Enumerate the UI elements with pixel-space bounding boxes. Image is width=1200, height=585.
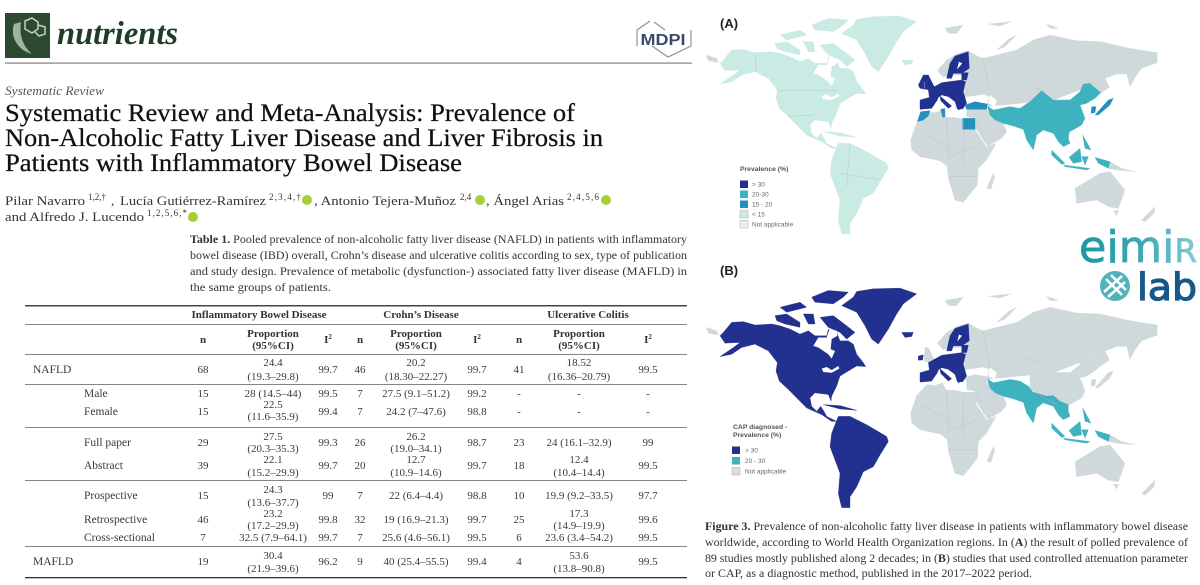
row: Prospective: 98.8 bbox=[467, 490, 487, 502]
gap in Scandinavia bbox=[957, 334, 962, 341]
journal name: nutrients bbox=[57, 16, 178, 52]
country borders bbox=[755, 53, 1070, 187]
row: Cross-sectional: 99.5 bbox=[638, 532, 658, 544]
row: Male: 28 (14.5–44) bbox=[245, 388, 302, 400]
row: NAFLD: NAFLD bbox=[33, 364, 71, 376]
authors: 2,3,4,† bbox=[269, 192, 302, 202]
article title: Patients with Inflammatory Bowel Disease bbox=[5, 150, 462, 177]
row: Abstract: 99.7 bbox=[467, 460, 487, 472]
table bbox=[25, 305, 687, 578]
row: Cross-sectional: 99.5 bbox=[467, 532, 487, 544]
legend B bbox=[732, 424, 787, 476]
row: MAFLD: 30.4 bbox=[263, 550, 283, 562]
not applicable regions bbox=[706, 22, 1157, 222]
row: MAFLD: (21.9–39.6) bbox=[247, 563, 299, 575]
row: Cross-sectional: 23.6 (3.4–54.2) bbox=[545, 532, 613, 544]
column headers: 2 bbox=[477, 333, 481, 341]
column headers: n bbox=[200, 334, 206, 346]
article title: Non-Alcoholic Fatty Liver Disease and Liver Fibrosis in bbox=[5, 125, 604, 152]
column headers bbox=[200, 328, 652, 352]
legend A: 15 - 20 bbox=[752, 202, 773, 208]
article type: Systematic Review bbox=[5, 83, 104, 98]
row: Female: - bbox=[646, 406, 650, 418]
journal header bbox=[5, 13, 691, 58]
column headers: I bbox=[644, 334, 648, 346]
row: NAFLD: 68 bbox=[198, 364, 209, 376]
row: Cross-sectional: 99.7 bbox=[318, 532, 338, 544]
map A: prevalence bbox=[706, 16, 1157, 234]
row: Female: - bbox=[577, 406, 581, 418]
icon: nutrients logo bbox=[5, 13, 50, 58]
row: Retrospective: 99.6 bbox=[638, 514, 658, 526]
table caption: the same groups of patients. bbox=[190, 282, 331, 294]
row: Full paper: 24 (16.1–32.9) bbox=[546, 437, 612, 449]
row: NAFLD: 41 bbox=[514, 364, 524, 376]
row: Female bbox=[84, 399, 650, 423]
row: Female: 99.4 bbox=[318, 406, 338, 418]
authors: , bbox=[111, 193, 114, 208]
row: Full paper bbox=[84, 431, 654, 455]
group headers bbox=[191, 309, 629, 321]
row: NAFLD: 99.7 bbox=[467, 364, 487, 376]
row: Male: Male bbox=[84, 388, 108, 400]
row: Cross-sectional: Cross-sectional bbox=[84, 532, 155, 544]
row: Cross-sectional: 25.6 (4.6–56.1) bbox=[382, 532, 450, 544]
column headers: Proportion bbox=[553, 328, 605, 340]
row: Retrospective: 19 (16.9–21.3) bbox=[383, 514, 449, 526]
row: Full paper: (19.0–34.1) bbox=[390, 443, 442, 455]
authors bbox=[5, 192, 611, 224]
legend B: 20 - 30 bbox=[745, 458, 766, 465]
row: Retrospective: (14.9–19.9) bbox=[553, 520, 605, 532]
row: Prospective: Prospective bbox=[84, 490, 138, 502]
row: Abstract: 12.7 bbox=[406, 454, 426, 466]
legend A: Prevalence (%) bbox=[740, 166, 788, 173]
row: Cross-sectional: 32.5 (7.9–64.1) bbox=[239, 532, 307, 544]
table caption: Table 1. Pooled prevalence of non-alcoholic fatty liver disease (NAFLD) in patients with inflammatory bbox=[190, 234, 687, 246]
row: MAFLD: MAFLD bbox=[33, 556, 73, 568]
row: NAFLD: 46 bbox=[354, 364, 366, 376]
legend A bbox=[740, 166, 794, 228]
table caption: bowel disease (IBD) overall, Crohn’s disease and ulcerative colitis according to sex, type of publication bbox=[190, 250, 687, 262]
row: MAFLD bbox=[33, 550, 658, 575]
row: Prospective: 22 (6.4–4.4) bbox=[389, 490, 443, 502]
row: Prospective: 7 bbox=[357, 490, 363, 502]
row: Abstract: 12.4 bbox=[569, 454, 589, 466]
label: panel B: (B) bbox=[720, 263, 738, 278]
row: Prospective: 97.7 bbox=[638, 490, 658, 502]
row: Full paper: 99 bbox=[642, 437, 654, 449]
column headers: Proportion bbox=[247, 328, 299, 340]
figure caption: worldwide, according to World Health Organization regions. In ( A) the result of polled prevalence of bbox=[705, 537, 1188, 549]
row: Prospective: 10 bbox=[514, 490, 525, 502]
authors: 1,2,5,6,* bbox=[147, 208, 188, 218]
row: NAFLD bbox=[33, 357, 658, 383]
row: Female: 7 bbox=[357, 406, 363, 418]
legend A: Not applicable bbox=[752, 222, 794, 228]
row: Female: 24.2 (7–47.6) bbox=[386, 406, 446, 418]
light teal: Americas and Greenland bbox=[720, 16, 917, 234]
icon: MDPI logo bbox=[637, 21, 691, 57]
row: Retrospective: 23.2 bbox=[263, 508, 283, 520]
row: Abstract: 99.5 bbox=[638, 460, 658, 472]
row: Full paper: 29 bbox=[198, 437, 209, 449]
row: Female: 22.5 bbox=[263, 399, 283, 411]
water bbox=[813, 329, 997, 379]
column headers: I bbox=[473, 334, 477, 346]
row: Full paper: 98.7 bbox=[467, 437, 487, 449]
row: Prospective: 15 bbox=[198, 490, 209, 502]
legend A: 20-30 bbox=[752, 192, 769, 198]
legend B: CAP diagnosed - bbox=[733, 424, 787, 431]
row: Full paper: (20.3–35.3) bbox=[247, 443, 299, 455]
eimiR lab logo bbox=[1079, 222, 1197, 309]
navy: Europe bbox=[918, 324, 969, 383]
row: MAFLD: (13.8–90.8) bbox=[553, 563, 605, 575]
row: NAFLD: (19.3–29.8) bbox=[247, 371, 299, 383]
row: Full paper: 27.5 bbox=[263, 431, 283, 443]
row: MAFLD: 99.5 bbox=[638, 556, 658, 568]
row: Full paper: 26.2 bbox=[406, 431, 426, 443]
row: Retrospective: 32 bbox=[354, 514, 366, 526]
row: Female: 15 bbox=[198, 406, 209, 418]
row: Retrospective: (17.2–29.9) bbox=[247, 520, 299, 532]
row: Full paper: 26 bbox=[354, 437, 366, 449]
row: MAFLD: 9 bbox=[357, 556, 363, 568]
row: Male: 99.5 bbox=[318, 388, 338, 400]
teal: South and Southeast Asia bbox=[987, 379, 1110, 443]
figure caption: Figure 3. Prevalence of non-alcoholic fatty liver disease in patients with inflammatory bowel disease bbox=[705, 521, 1188, 533]
Red Sea bbox=[976, 130, 987, 147]
row: Male bbox=[84, 388, 650, 400]
Red Sea bbox=[976, 403, 987, 420]
authors: and Alfredo J. Lucendo bbox=[5, 209, 144, 224]
eimiR wordmark: eimiR bbox=[1079, 222, 1197, 273]
authors: , Antonio Tejera-Muñoz bbox=[314, 193, 456, 208]
figure caption: or CAP, as a diagnostic method, published in the 2017–2022 period. bbox=[705, 568, 1032, 580]
column headers: (95%CI) bbox=[395, 340, 437, 352]
table caption bbox=[190, 234, 687, 294]
row: Abstract: (10.4–14.4) bbox=[553, 467, 605, 479]
row: NAFLD: (18.30–22.27) bbox=[385, 371, 447, 383]
row: Abstract: (15.2–29.9) bbox=[247, 467, 299, 479]
legend B: > 30 bbox=[745, 448, 758, 454]
row: Retrospective bbox=[84, 508, 658, 532]
row: Retrospective: 46 bbox=[198, 514, 209, 526]
icon: lab emblem bbox=[1100, 271, 1130, 301]
row: NAFLD: 18.52 bbox=[567, 357, 591, 369]
row: Female: (11.6–35.9) bbox=[248, 411, 299, 423]
row: Cross-sectional: 7 bbox=[357, 532, 363, 544]
gaps in Europe bbox=[924, 62, 962, 88]
navy: Europe bbox=[918, 52, 969, 110]
teal: Asia bbox=[987, 83, 1110, 170]
authors: 1,2,† bbox=[88, 192, 106, 202]
row: Retrospective: 25 bbox=[514, 514, 525, 526]
group headers: Inflammatory Bowel Disease bbox=[191, 309, 327, 321]
row: Abstract bbox=[84, 454, 658, 479]
row: Male: - bbox=[646, 388, 650, 400]
row: NAFLD: 99.7 bbox=[318, 364, 338, 376]
row: Male: - bbox=[577, 388, 581, 400]
row: MAFLD: 19 bbox=[198, 556, 209, 568]
map B: CAP diagnosed prevalence bbox=[706, 288, 1157, 508]
row: Abstract: 99.7 bbox=[318, 460, 338, 472]
row: MAFLD: 53.6 bbox=[569, 550, 589, 562]
authors: 2,4 bbox=[460, 192, 472, 202]
article title bbox=[5, 100, 604, 177]
row: Male: - bbox=[517, 388, 521, 400]
row: Prospective bbox=[84, 484, 658, 509]
column headers: I bbox=[324, 334, 328, 346]
legend B: Not applicable bbox=[745, 468, 787, 476]
row: Retrospective: 99.7 bbox=[467, 514, 487, 526]
figure caption: 89 studies mostly published along 2 decades; in ( B) studies that used controlled attenuation parameter bbox=[705, 553, 1188, 565]
row: Retrospective: Retrospective bbox=[84, 514, 147, 526]
column headers: Proportion bbox=[390, 328, 442, 340]
row: Cross-sectional: 7 bbox=[200, 532, 206, 544]
navy: Americas, Greenland and Iceland bbox=[720, 288, 917, 508]
row: Female: Female bbox=[84, 406, 118, 418]
icon: MDPI logo: MDPI bbox=[640, 32, 686, 49]
table caption: and study design. Prevalence of metabolic (dysfunction-) associated fatty liver disease (MAFLD) in bbox=[190, 266, 687, 278]
row: Full paper: 23 bbox=[514, 437, 525, 449]
row: Full paper: Full paper bbox=[84, 437, 131, 449]
group headers: Crohn’s Disease bbox=[383, 309, 459, 321]
legend A: < 15 bbox=[752, 212, 765, 218]
row: MAFLD: 99.4 bbox=[467, 556, 487, 568]
row: Female: - bbox=[517, 406, 521, 418]
row: Abstract: (10.9–14.6) bbox=[390, 467, 442, 479]
row: Abstract: 20 bbox=[354, 460, 366, 472]
row: Abstract: 39 bbox=[198, 460, 209, 472]
row: MAFLD: 40 (25.4–55.5) bbox=[383, 556, 449, 568]
row: NAFLD: 24.4 bbox=[263, 357, 283, 369]
row: NAFLD: 99.5 bbox=[638, 364, 658, 376]
row: Abstract: 22.1 bbox=[263, 454, 283, 466]
article title: Systematic Review and Meta-Analysis: Prevalence of bbox=[5, 100, 576, 127]
row: Abstract: Abstract bbox=[84, 460, 124, 472]
lab wordmark: lab bbox=[1137, 266, 1197, 309]
row: MAFLD: 4 bbox=[516, 556, 522, 568]
column headers: (95%CI) bbox=[252, 340, 294, 352]
not applicable regions bbox=[706, 294, 1157, 495]
water bbox=[813, 57, 997, 107]
legend A: > 30 bbox=[752, 182, 765, 188]
figure caption bbox=[705, 521, 1188, 580]
row: Female: 98.8 bbox=[467, 406, 487, 418]
label: panel A: (A) bbox=[720, 16, 738, 31]
legend B: Prevalence (%) bbox=[733, 432, 781, 439]
row: Cross-sectional bbox=[84, 532, 658, 544]
row: Prospective: (13.6–37.7) bbox=[247, 497, 299, 509]
country borders bbox=[922, 331, 1070, 450]
group headers: Ulcerative Colitis bbox=[547, 309, 629, 321]
row: Male: 99.2 bbox=[467, 388, 487, 400]
authors: Pilar Navarro bbox=[5, 193, 85, 208]
authors: 2,4,5,6 bbox=[567, 192, 600, 202]
row: Male: 27.5 (9.1–51.2) bbox=[382, 388, 450, 400]
row: Full paper: 99.3 bbox=[318, 437, 338, 449]
blue: Egypt, Turkey, Japan and Maghreb bbox=[917, 98, 1113, 129]
column headers: (95%CI) bbox=[558, 340, 600, 352]
row: NAFLD: (16.36–20.79) bbox=[548, 371, 610, 383]
row: Prospective: 19.9 (9.2–33.5) bbox=[545, 490, 613, 502]
row: Retrospective: 17.3 bbox=[569, 508, 589, 520]
row: Prospective: 99 bbox=[322, 490, 334, 502]
row: Abstract: 18 bbox=[514, 460, 525, 472]
column headers: n bbox=[357, 334, 363, 346]
row: MAFLD: 96.2 bbox=[318, 556, 338, 568]
row: Male: 7 bbox=[357, 388, 363, 400]
column headers: n bbox=[516, 334, 522, 346]
column headers: 2 bbox=[328, 333, 332, 341]
row: Cross-sectional: 6 bbox=[516, 532, 522, 544]
authors: Lucía Gutiérrez-Ramírez bbox=[120, 193, 266, 208]
row: Retrospective: 99.8 bbox=[318, 514, 338, 526]
row: Prospective: 24.3 bbox=[263, 484, 283, 496]
authors: , Ángel Arias bbox=[486, 193, 564, 208]
row: Male: 15 bbox=[198, 388, 209, 400]
row: NAFLD: 20.2 bbox=[406, 357, 426, 369]
column headers: 2 bbox=[648, 333, 652, 341]
